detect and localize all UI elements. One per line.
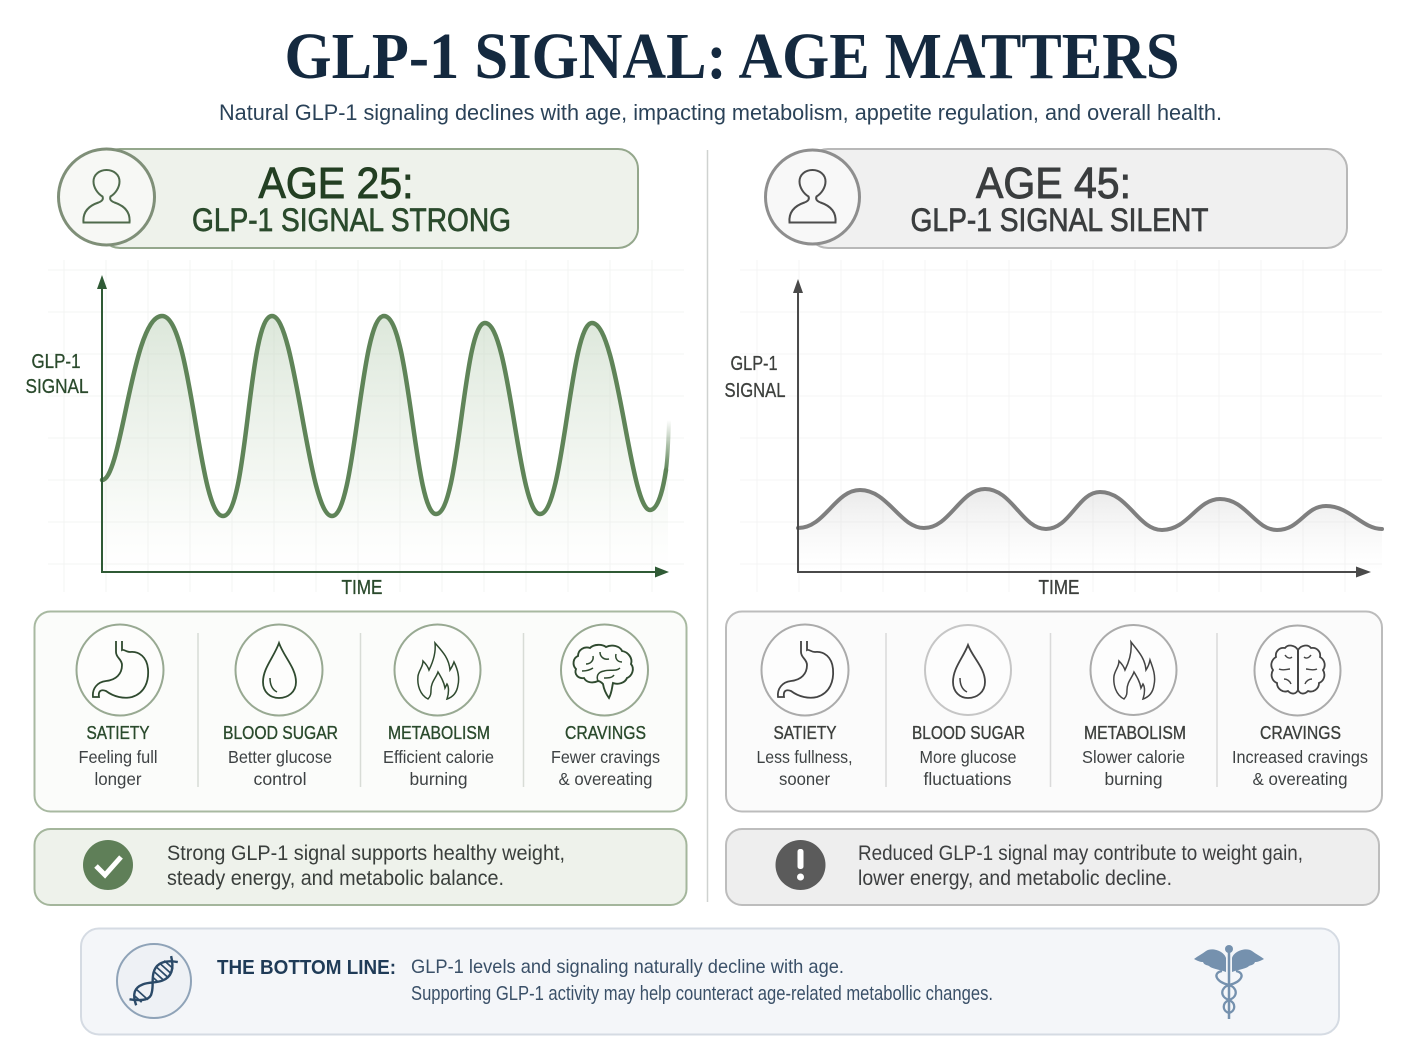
text: blood sugar: Better glucose <box>228 747 332 767</box>
icon: check <box>83 840 133 890</box>
icon: brain side <box>561 624 648 716</box>
chart: age 25 signal: SIGNAL <box>26 376 88 398</box>
text: cravings: CRAVINGS <box>565 722 646 743</box>
icon: brain front <box>1254 626 1340 716</box>
bottom line text: GLP-1 levels and signaling naturally decline with age. <box>411 956 844 978</box>
subheading: signal strong: GLP-1 SIGNAL STRONG <box>192 202 511 238</box>
text: satiety <box>78 722 158 789</box>
chart: age 25 signal <box>26 260 684 599</box>
text: metabolism: Slower calorie <box>1082 747 1185 767</box>
text: metabolism: METABOLISM <box>1084 722 1186 743</box>
text: blood sugar: More glucose <box>920 747 1016 767</box>
icon: exclamation <box>776 840 826 890</box>
callout text <box>167 842 565 890</box>
heading: age 25: AGE 25: <box>258 159 414 208</box>
panel: bottom line <box>81 928 1339 1034</box>
text: blood sugar: BLOOD SUGAR <box>912 722 1025 743</box>
text: metabolism: burning <box>1104 769 1162 789</box>
text: blood sugar <box>223 722 338 789</box>
text: metabolism <box>1082 722 1186 789</box>
text: cravings: & overeating <box>1252 769 1348 789</box>
icon: person, age 25 <box>58 149 154 245</box>
label: the bottom line: THE BOTTOM LINE: <box>217 956 396 979</box>
text: cravings: Fewer cravings <box>551 747 660 767</box>
callout text: steady energy, and metabolic balance. <box>167 867 504 890</box>
text: satiety: Feeling full <box>78 747 158 767</box>
y axis label: GLP-1 <box>730 353 778 375</box>
icon: drop <box>236 624 322 716</box>
text: blood sugar: control <box>254 769 306 789</box>
icon: flame <box>1090 625 1176 715</box>
signal curve <box>798 489 1382 530</box>
text: cravings <box>551 722 660 789</box>
icon: flame <box>394 624 480 716</box>
icon: person, age 45 <box>766 150 860 244</box>
subtitle: Natural GLP-1 signaling declines with age, impacting metabolism, appetite regulation, and overall health. <box>219 100 1222 125</box>
bottom line text: Supporting GLP-1 activity may help counteract age-related metabollic changes. <box>411 983 993 1005</box>
text: satiety: SATIETY <box>774 722 836 743</box>
text: blood sugar: BLOOD SUGAR <box>223 722 338 743</box>
subheading: signal silent: GLP-1 SIGNAL SILENT <box>910 202 1208 238</box>
callout text: Reduced GLP-1 signal may contribute to weight gain, <box>858 842 1303 865</box>
axes <box>102 284 660 572</box>
axes <box>798 288 1360 572</box>
text: metabolism <box>383 722 494 789</box>
panel: age 45 effects <box>726 612 1382 812</box>
callout: age 45 <box>726 829 1379 905</box>
bottom line text <box>411 956 993 1005</box>
callout text: lower energy, and metabolic decline. <box>858 867 1172 890</box>
text: satiety <box>756 722 852 789</box>
text: blood sugar <box>912 722 1025 789</box>
icon: drop <box>925 625 1011 715</box>
header: age 25 <box>58 149 638 248</box>
panel: age 25 effects <box>34 612 686 812</box>
icon: caduceus <box>1194 945 1264 1019</box>
text: cravings: & overeating <box>558 769 652 789</box>
icon: dna <box>117 944 191 1018</box>
text: metabolism: METABOLISM <box>388 722 490 743</box>
callout text <box>858 842 1303 890</box>
text: cravings <box>1232 722 1368 789</box>
callout text: Strong GLP-1 signal supports healthy weight, <box>167 842 565 865</box>
header: age 45 <box>766 149 1347 248</box>
icon: stomach <box>762 624 848 716</box>
text: satiety: sooner <box>779 769 830 789</box>
text: cravings: CRAVINGS <box>1260 722 1341 743</box>
chart: age 45 signal: SIGNAL <box>724 380 786 402</box>
text: satiety: SATIETY <box>86 722 150 743</box>
text: blood sugar: fluctuations <box>924 769 1012 789</box>
text: satiety: Less fullness, <box>756 747 852 767</box>
x axis label: TIME <box>342 577 382 599</box>
text: metabolism: burning <box>410 769 468 789</box>
icon: stomach <box>76 624 164 716</box>
heading: age 45: AGE 45: <box>976 159 1131 208</box>
text: cravings: Increased cravings <box>1232 747 1368 767</box>
x axis label: TIME <box>1038 577 1080 599</box>
text: metabolism: Efficient calorie <box>383 747 494 767</box>
center divider <box>706 150 708 902</box>
signal curve <box>102 316 666 516</box>
chart: age 45 signal <box>724 260 1382 599</box>
callout: age 25 <box>34 829 686 905</box>
title: GLP-1 SIGNAL: AGE MATTERS <box>284 20 1180 93</box>
text: satiety: longer <box>94 769 142 789</box>
y axis label: GLP-1 <box>32 351 80 373</box>
